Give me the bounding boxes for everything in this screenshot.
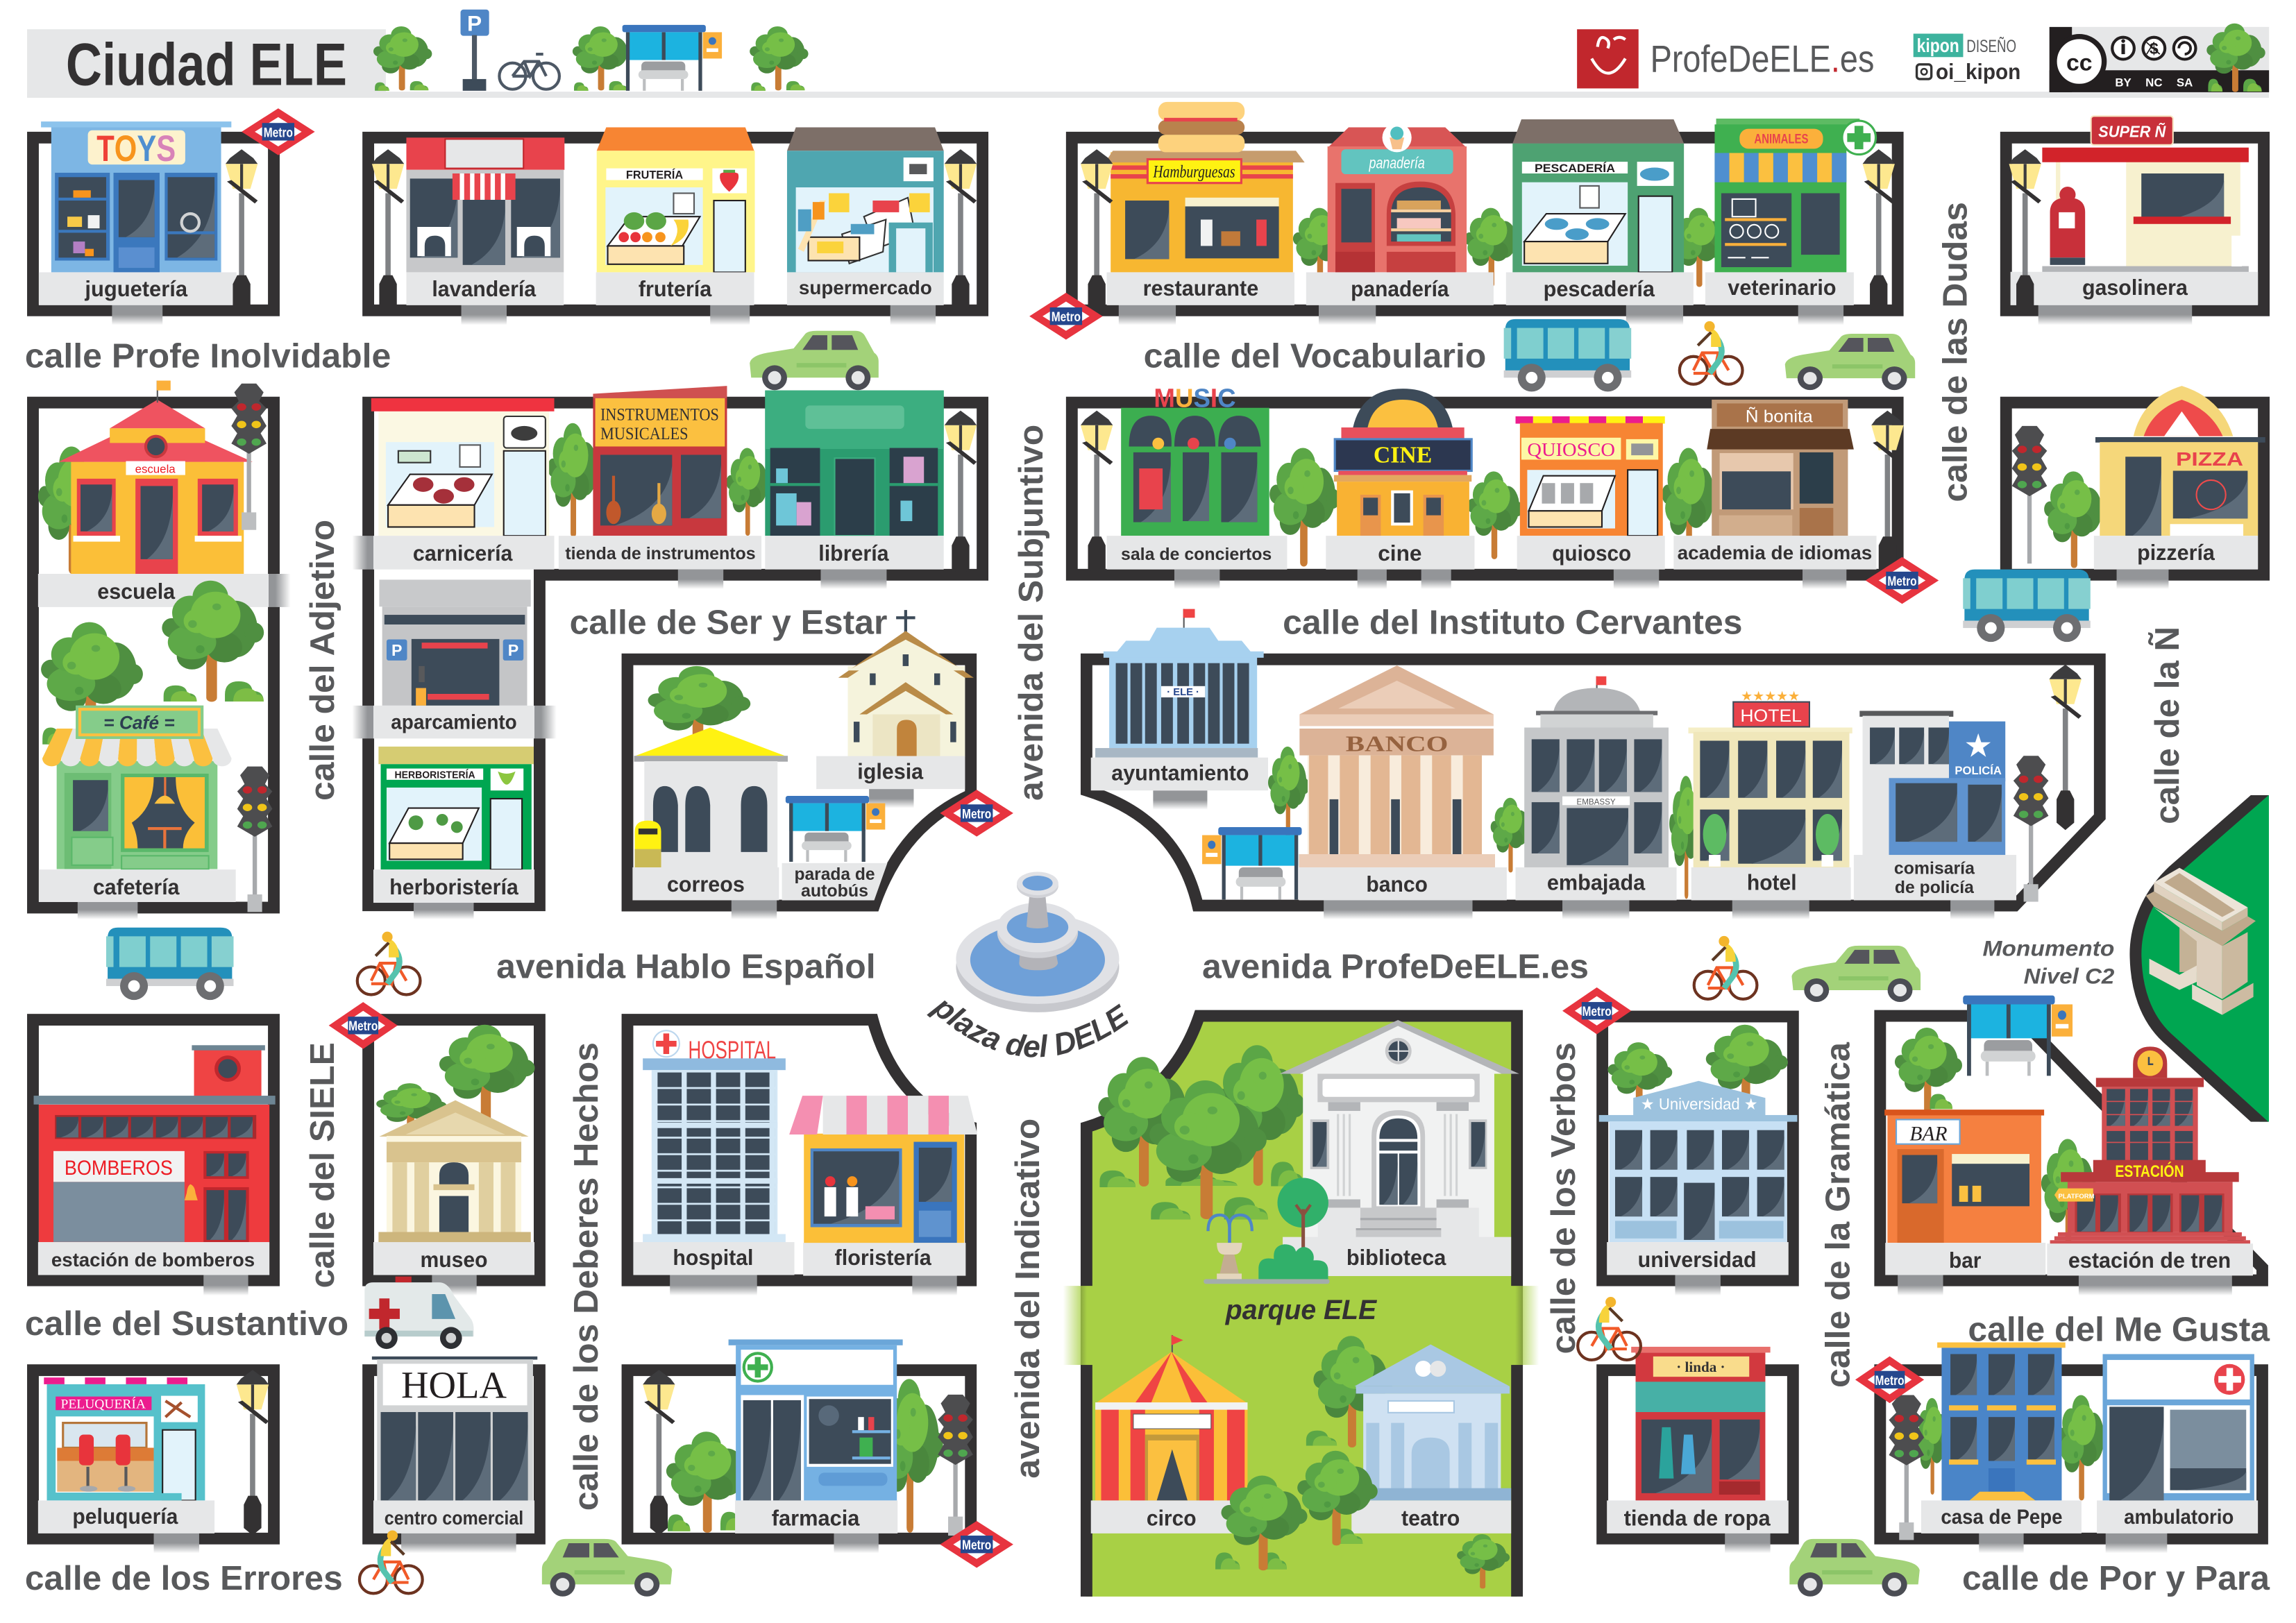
label: biblioteca bbox=[1283, 1237, 1511, 1276]
label: farmacia: farmacia bbox=[772, 1505, 860, 1530]
building: escuela: escuela bbox=[135, 462, 176, 475]
building: centro comercial: HOLA bbox=[401, 1364, 507, 1407]
header band bbox=[27, 29, 2269, 98]
building: hotel: HOTEL bbox=[1740, 706, 1802, 726]
metro sign: iglesia: Metro bbox=[962, 807, 991, 822]
building: estación de tren: PLATFORM bbox=[2059, 1193, 2095, 1200]
label: museo: museo bbox=[420, 1247, 488, 1272]
metro sign: casa de Pepe bbox=[1855, 1357, 1924, 1403]
building: escuela bbox=[58, 381, 253, 574]
street names horizontal bbox=[25, 337, 2270, 1597]
lamps bbox=[1081, 149, 1895, 315]
label: teatro: teatro bbox=[1401, 1505, 1460, 1530]
building: carnicería bbox=[371, 398, 555, 536]
panel: sala de conciertos to academia block bbox=[1072, 384, 1904, 589]
street names vertical: calle del Adjetivo bbox=[303, 520, 341, 801]
label: escuela: escuela bbox=[97, 579, 176, 604]
licence: cc by nc sa: BY bbox=[2115, 76, 2132, 89]
metro sign: restaurante bbox=[1029, 293, 1103, 339]
street names horizontal: calle de los Errores bbox=[25, 1558, 343, 1597]
building: comisaría de policía: POLICÍA bbox=[1955, 764, 2002, 777]
label: sala de conciertos: sala de conciertos bbox=[1121, 545, 1272, 564]
building: pescadería bbox=[1512, 119, 1684, 272]
trees bbox=[376, 1025, 534, 1136]
label: floristería bbox=[803, 1243, 965, 1276]
label: frutería bbox=[596, 272, 754, 305]
building: ambulatorio bbox=[2103, 1354, 2254, 1500]
panel: peluquería block bbox=[33, 1370, 274, 1553]
street names horizontal: avenida ProfeDeELE.es bbox=[1202, 946, 1589, 985]
trees bbox=[1269, 448, 1718, 566]
label: cafetería: cafetería bbox=[93, 874, 180, 899]
label: banco: banco bbox=[1366, 872, 1428, 897]
metro sign: casa de Pepe: Metro bbox=[1875, 1374, 1905, 1388]
label: tienda de ropa: tienda de ropa bbox=[1624, 1505, 1771, 1530]
panel: escuela and cafetería block bbox=[33, 381, 291, 919]
panel: juguetería block bbox=[33, 121, 274, 325]
building: bar: BAR bbox=[1909, 1123, 1948, 1145]
label: floristería: floristería bbox=[835, 1245, 931, 1270]
building: hospital bbox=[643, 1030, 786, 1243]
label: restaurante bbox=[1107, 272, 1294, 305]
street names vertical: calle de los Deberes Hechos bbox=[566, 1042, 605, 1511]
lamp and traffic light bbox=[2014, 665, 2082, 902]
building: ayuntamiento bbox=[1095, 609, 1264, 758]
label: plaza del DELE: plaza del DELE bbox=[927, 1001, 1129, 1057]
building: gasolinera: SUPER Ñ bbox=[2098, 121, 2166, 140]
trees bbox=[1268, 747, 1705, 899]
metro sign: juguetería bbox=[242, 108, 315, 155]
label: teatro bbox=[1351, 1500, 1511, 1533]
traffic light bbox=[1889, 1395, 1924, 1540]
building: cine bbox=[1334, 389, 1471, 536]
trees right of block bbox=[162, 581, 264, 702]
lamp and traffic light bbox=[643, 1370, 973, 1536]
street names vertical bbox=[303, 202, 2186, 1511]
building: universidad bbox=[1599, 1081, 1797, 1242]
building: casa de Pepe bbox=[1937, 1343, 2066, 1500]
building: librería bbox=[765, 391, 944, 536]
lamp bbox=[2009, 149, 2041, 315]
building: herboristería: HERBORISTERÍA bbox=[395, 769, 475, 781]
label: parada de autobús: autobús bbox=[801, 881, 868, 901]
label: frutería: frutería bbox=[639, 276, 712, 301]
panel: gasolinera block bbox=[2006, 116, 2264, 325]
panel: monumento Nivel C2 bbox=[1983, 779, 2279, 1139]
building: hotel: ★★★★★ bbox=[1741, 689, 1800, 704]
panel: universidad block bbox=[1599, 1017, 1797, 1295]
street names vertical: calle de la Ñ bbox=[2147, 627, 2186, 824]
label: estación de bomberos: estación de bomberos bbox=[51, 1249, 255, 1271]
metro sign: restaurante: Metro bbox=[1052, 310, 1081, 325]
label: iglesia bbox=[816, 756, 965, 789]
building: quiosco bbox=[1516, 416, 1665, 536]
lamps bbox=[1081, 411, 1904, 576]
lamp bbox=[945, 411, 977, 576]
tree bbox=[648, 666, 750, 754]
building: embajada: EMBASSY bbox=[1577, 797, 1616, 806]
panel: pizzería block bbox=[2006, 386, 2265, 589]
label: Monumento Nivel C2: Nivel C2 bbox=[2024, 964, 2115, 989]
panel: parque ELE bbox=[1063, 1016, 1539, 1597]
building: tienda de ropa: · linda · bbox=[1676, 1359, 1725, 1375]
street names vertical: calle del SIELE bbox=[303, 1042, 341, 1289]
label: hospital: hospital bbox=[673, 1245, 753, 1270]
building: comisaría de policía bbox=[1859, 711, 2005, 856]
label: pescadería: pescadería bbox=[1544, 276, 1655, 301]
building: supermercado bbox=[787, 128, 944, 272]
tree bbox=[2044, 471, 2106, 568]
panel: restaurante to veterinario block bbox=[1072, 102, 1898, 325]
label: carnicería: carnicería bbox=[413, 541, 513, 566]
label: casa de Pepe: casa de Pepe bbox=[1941, 1506, 2062, 1529]
label: panadería bbox=[1306, 272, 1494, 305]
label: lavandería bbox=[406, 272, 564, 305]
label: cafetería bbox=[39, 869, 236, 902]
panel: museo block bbox=[369, 1020, 539, 1295]
label: peluquería bbox=[38, 1500, 214, 1533]
building: farmacia bbox=[729, 1339, 903, 1500]
building: banco bbox=[1299, 665, 1495, 867]
label: museo bbox=[373, 1242, 534, 1275]
label: ambulatorio: ambulatorio bbox=[2124, 1506, 2234, 1529]
label: universidad bbox=[1607, 1242, 1789, 1275]
street names horizontal: calle del Instituto Cervantes bbox=[1283, 602, 1743, 641]
licence: cc by nc sa bbox=[2050, 24, 2269, 92]
bus stop bbox=[1963, 996, 2073, 1076]
label: centro comercial bbox=[373, 1500, 534, 1533]
metro sign: universidad: Metro bbox=[1582, 1005, 1612, 1019]
panel: farmacia block bbox=[627, 1339, 973, 1553]
trees bbox=[38, 446, 143, 745]
label: herboristería bbox=[373, 869, 534, 903]
logo: ProfeDeELE.es bbox=[1577, 29, 1874, 88]
building: veterinario: ANIMALES bbox=[1754, 133, 1808, 147]
building: quiosco: QUIOSCO bbox=[1527, 439, 1615, 460]
building: academia de idiomas: Ñ bonita bbox=[1746, 407, 1814, 427]
title: Ciudad ELE bbox=[66, 31, 347, 98]
building: lavandería bbox=[406, 137, 564, 272]
building: comisaría de policía: ★ bbox=[1964, 728, 1993, 764]
label: universidad: universidad bbox=[1638, 1247, 1757, 1272]
trees bbox=[666, 1379, 943, 1533]
label: academia de idiomas bbox=[1673, 536, 1877, 570]
building: herboristería bbox=[378, 747, 534, 869]
traffic light bbox=[2012, 426, 2047, 563]
panel: lavandería to supermercado block bbox=[369, 128, 983, 325]
licence: cc by nc sa: cc bbox=[2066, 49, 2093, 76]
panel: carnicería, tienda de instrumentos, librería, aparcamiento, herboristería block bbox=[352, 386, 983, 919]
label: panadería: panadería bbox=[1351, 276, 1449, 301]
park trees lower bbox=[1306, 1336, 1392, 1447]
label: centro comercial: centro comercial bbox=[385, 1507, 523, 1529]
label: pescadería bbox=[1506, 272, 1694, 305]
metro sign: museo bbox=[329, 1002, 398, 1049]
label: supermercado bbox=[787, 272, 944, 305]
street names vertical: calle de la Gramática bbox=[1818, 1042, 1857, 1388]
panel: tienda de ropa block bbox=[1603, 1347, 1793, 1553]
label: ambulatorio bbox=[2097, 1500, 2258, 1533]
label: veterinario: veterinario bbox=[1728, 275, 1837, 300]
label: parque ELE: parque ELE bbox=[1225, 1295, 1377, 1325]
label: estación de bomberos bbox=[38, 1242, 269, 1275]
label: parada de autobús bbox=[782, 863, 887, 901]
building: gasolinera bbox=[2042, 116, 2249, 273]
label: librería: librería bbox=[818, 541, 889, 566]
building: circo bbox=[1095, 1335, 1247, 1500]
building: estación de tren bbox=[2050, 1046, 2250, 1244]
building: tienda de instrumentos bbox=[593, 386, 727, 536]
label: ayuntamiento bbox=[1091, 758, 1268, 790]
building: panadería bbox=[1328, 123, 1467, 272]
building: aparcamiento: P bbox=[391, 641, 402, 659]
label: sala de conciertos bbox=[1107, 536, 1287, 570]
building: teatro bbox=[1354, 1345, 1511, 1500]
building: biblioteca bbox=[1280, 1020, 1519, 1237]
vehicle: ambulance bbox=[364, 1277, 473, 1349]
building: bar bbox=[1884, 1110, 2044, 1243]
street names horizontal: avenida Hablo Español bbox=[496, 946, 876, 985]
building: tienda de instrumentos: INSTRUMENTOS bbox=[600, 405, 719, 424]
label: farmacia bbox=[735, 1500, 897, 1533]
label: juguetería: juguetería bbox=[84, 276, 187, 301]
label: cine bbox=[1326, 536, 1474, 570]
label: comisaría de policía: de policía bbox=[1895, 878, 1975, 897]
trees bbox=[1607, 1025, 1788, 1112]
label: pizzería bbox=[2094, 536, 2258, 570]
building: hospital: HOSPITAL bbox=[689, 1036, 776, 1064]
building: peluquería bbox=[44, 1377, 205, 1500]
label: lavandería: lavandería bbox=[432, 276, 537, 301]
building: aparcamiento: P bbox=[508, 641, 518, 659]
label: correos bbox=[632, 867, 779, 900]
label: estación de tren: estación de tren bbox=[2068, 1248, 2231, 1273]
street names vertical: calle de las Dudas bbox=[1935, 202, 1974, 502]
label: academia de idiomas: academia de idiomas bbox=[1678, 542, 1872, 563]
label: correos: correos bbox=[667, 872, 745, 897]
logo: kipon bbox=[1914, 34, 2020, 84]
building: veterinario bbox=[1714, 119, 1876, 272]
building: museo bbox=[378, 1101, 531, 1243]
building: centro comercial bbox=[372, 1357, 537, 1500]
building: academia de idiomas bbox=[1707, 400, 1854, 536]
label: iglesia: iglesia bbox=[857, 758, 924, 783]
street names horizontal: calle de Por y Para bbox=[1962, 1558, 2270, 1597]
building: ayuntamiento: · ELE · bbox=[1167, 687, 1199, 698]
building: sala de conciertos: MUSIC bbox=[1154, 384, 1236, 413]
metro sign: farmacia bbox=[940, 1521, 1013, 1567]
panel: hospital and floristería block bbox=[627, 1020, 977, 1295]
building: banco: BANCO bbox=[1346, 731, 1448, 756]
small fountain and garden bbox=[1204, 1178, 1330, 1284]
label: hospital bbox=[633, 1242, 795, 1275]
label: Monumento Nivel C2: Monumento bbox=[1983, 936, 2114, 961]
building: restaurante: Hamburguesas bbox=[1153, 162, 1235, 181]
label: biblioteca: biblioteca bbox=[1347, 1245, 1446, 1270]
label: herboristería: herboristería bbox=[389, 874, 518, 899]
label: casa de Pepe bbox=[1921, 1500, 2082, 1533]
logo: kipon: DISEÑO bbox=[1966, 36, 2016, 56]
metro sign: academia: Metro bbox=[1887, 575, 1917, 589]
building: peluquería: PELUQUERÍA bbox=[61, 1397, 146, 1412]
label: hotel: hotel bbox=[1747, 870, 1797, 895]
building: sala de conciertos bbox=[1121, 384, 1269, 536]
street names vertical: calle de los Verbos bbox=[1544, 1042, 1582, 1354]
street names horizontal: calle del Vocabulario bbox=[1144, 337, 1486, 375]
building: hotel bbox=[1688, 689, 1852, 867]
building: frutería bbox=[597, 128, 755, 272]
label: librería bbox=[765, 536, 944, 570]
trees bbox=[1293, 208, 1728, 287]
label: hotel bbox=[1691, 867, 1851, 900]
building: embajada bbox=[1524, 677, 1669, 867]
building: aparcamiento bbox=[379, 579, 531, 706]
building: iglesia bbox=[838, 610, 974, 757]
traffic lights bbox=[231, 384, 272, 912]
street names horizontal: calle de Ser y Estar bbox=[570, 602, 887, 641]
building: frutería: FRUTERÍA bbox=[626, 168, 683, 181]
building: restaurante bbox=[1105, 102, 1305, 272]
label: restaurante: restaurante bbox=[1143, 275, 1258, 300]
building: pizzería: PIZZA bbox=[2176, 448, 2243, 470]
header street furniture bbox=[373, 10, 809, 91]
building: pizzería bbox=[2095, 386, 2265, 536]
panel: casa de Pepe and ambulatorio block bbox=[1880, 1343, 2262, 1553]
label: comisaría de policía: comisaría bbox=[1894, 858, 1975, 878]
label: tienda de instrumentos: tienda de instrumentos bbox=[565, 544, 756, 563]
street names horizontal: calle del Me Gusta bbox=[1968, 1309, 2270, 1348]
trees bbox=[548, 423, 770, 537]
licence: cc by nc sa: NC bbox=[2145, 76, 2163, 89]
building: tienda de instrumentos: MUSICALES bbox=[600, 424, 689, 443]
building: tienda de ropa bbox=[1631, 1347, 1771, 1500]
logo: kipon: oi_kipon bbox=[1936, 59, 2020, 84]
street names vertical: avenida del Indicativo bbox=[1008, 1119, 1047, 1479]
lamp bbox=[237, 1370, 269, 1536]
building: correos bbox=[634, 728, 788, 867]
label: estación de tren bbox=[2047, 1243, 2253, 1275]
panel: estación de bomberos block bbox=[33, 1020, 276, 1295]
label: bar bbox=[1885, 1243, 2045, 1275]
header street furniture: P bbox=[467, 10, 482, 35]
label: circo: circo bbox=[1147, 1505, 1197, 1530]
building: juguetería bbox=[41, 121, 231, 272]
label: quiosco bbox=[1517, 536, 1665, 570]
licence: cc by nc sa: SA bbox=[2177, 76, 2193, 89]
building: floristería bbox=[789, 1096, 977, 1243]
label: parada de autobús: parada de bbox=[795, 865, 875, 884]
label: circo bbox=[1091, 1500, 1251, 1533]
building: estación de tren: ESTACIÓN bbox=[2115, 1162, 2184, 1181]
vehicles: cars bbox=[542, 331, 1921, 1597]
metro sign: iglesia bbox=[940, 790, 1013, 837]
licence: cc by nc sa: $ bbox=[2150, 40, 2159, 58]
building: bomberos bbox=[34, 1045, 276, 1242]
tree bbox=[1895, 1028, 2097, 1253]
fountain: plaza del DELE bbox=[956, 872, 1119, 1012]
vehicles: bicycles bbox=[357, 321, 1757, 1593]
trees bbox=[1915, 1395, 2107, 1500]
panel: bar and estación de tren block bbox=[1880, 996, 2262, 1295]
label: gasolinera: gasolinera bbox=[2082, 275, 2188, 300]
label: embajada: embajada bbox=[1547, 870, 1646, 895]
building: universidad: ★ Universidad ★ bbox=[1641, 1095, 1758, 1113]
label: supermercado: supermercado bbox=[799, 277, 932, 298]
metro sign: museo: Metro bbox=[348, 1019, 378, 1034]
building: panadería: panadería bbox=[1369, 154, 1425, 172]
bus stop bbox=[786, 796, 885, 862]
logo: kipon: kipon bbox=[1917, 35, 1959, 56]
panel: centro comercial block bbox=[369, 1357, 539, 1553]
park trees bbox=[1098, 1045, 1305, 1219]
label: comisaría de policía bbox=[1854, 855, 2016, 900]
label: tienda de instrumentos bbox=[559, 536, 761, 570]
metro sign: universidad bbox=[1562, 987, 1631, 1034]
panel: correos, iglesia, parada de autobús block bbox=[627, 610, 974, 919]
label: tienda de ropa bbox=[1607, 1500, 1789, 1533]
label: Monumento Nivel C2 bbox=[1983, 936, 2115, 989]
building: cine: CINE bbox=[1374, 443, 1432, 468]
street names horizontal: calle Profe Inolvidable bbox=[25, 337, 391, 375]
street names horizontal: calle del Sustantivo bbox=[25, 1304, 348, 1343]
lamps bbox=[372, 149, 977, 315]
park trees foreground bbox=[1215, 1451, 1510, 1588]
building: bomberos: BOMBEROS bbox=[65, 1157, 173, 1180]
label: aparcamiento bbox=[373, 706, 534, 738]
label: carnicería bbox=[373, 536, 555, 570]
label: embajada bbox=[1516, 867, 1677, 900]
metro sign: farmacia: Metro bbox=[962, 1538, 991, 1553]
label: peluquería: peluquería bbox=[72, 1504, 178, 1529]
label: gasolinera bbox=[2011, 272, 2258, 305]
monument arch bbox=[2146, 868, 2256, 1015]
building: pescadería: PESCADERÍA bbox=[1535, 162, 1615, 175]
metro sign: juguetería: Metro bbox=[264, 126, 293, 140]
logo: ProfeDeELE.es: ProfeDeELE.es bbox=[1651, 37, 1874, 80]
building: juguetería: TOYS bbox=[96, 128, 176, 169]
building: cafetería: = Café = bbox=[103, 713, 175, 733]
panel: ayuntamiento to comisaría block bbox=[1086, 609, 2100, 919]
bus stop bbox=[1202, 827, 1302, 899]
building: cafetería bbox=[42, 706, 232, 869]
label: aparcamiento: aparcamiento bbox=[391, 711, 517, 734]
metro sign: academia bbox=[1866, 557, 1939, 604]
label: veterinario bbox=[1705, 272, 1854, 305]
label: bar: bar bbox=[1949, 1248, 1981, 1273]
label: ayuntamiento: ayuntamiento bbox=[1111, 760, 1249, 785]
street names vertical: avenida del Subjuntivo bbox=[1011, 425, 1050, 801]
label: escuela bbox=[38, 574, 269, 607]
label: pizzería: pizzería bbox=[2137, 540, 2215, 565]
label: juguetería bbox=[39, 272, 237, 305]
label: quiosco: quiosco bbox=[1552, 541, 1631, 566]
label: cine: cine bbox=[1378, 541, 1422, 566]
vehicles: buses bbox=[106, 319, 2091, 1000]
label: banco bbox=[1299, 867, 1507, 900]
lamp bbox=[226, 149, 258, 315]
